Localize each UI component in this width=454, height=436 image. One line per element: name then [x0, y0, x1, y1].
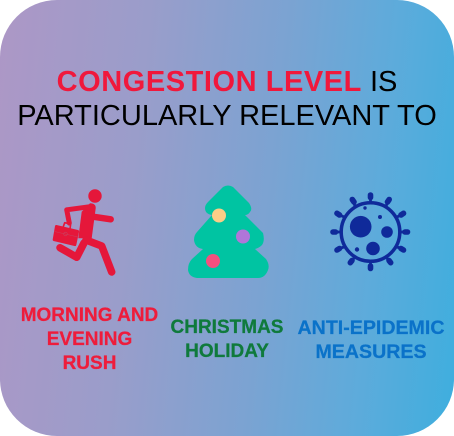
label: morning and evening rush: MORNING AND [21, 305, 158, 326]
label: morning and evening rush: RUSH [63, 353, 116, 374]
title: CONGESTION LEVEL IS [57, 66, 397, 98]
label: anti-epidemic measures: MEASURES [315, 341, 427, 363]
label: anti-epidemic measures: ANTI-EPIDEMIC [298, 317, 444, 339]
label: christmas holiday: CHRISTMAS [171, 317, 283, 338]
label: christmas holiday: HOLIDAY [185, 341, 269, 362]
title: PARTICULARLY RELEVANT TO [17, 100, 437, 132]
label: christmas holiday [171, 317, 283, 362]
label: anti-epidemic measures [298, 317, 444, 363]
label: morning and evening rush: EVENING [47, 329, 132, 350]
title [17, 66, 437, 132]
label: morning and evening rush [21, 305, 158, 374]
